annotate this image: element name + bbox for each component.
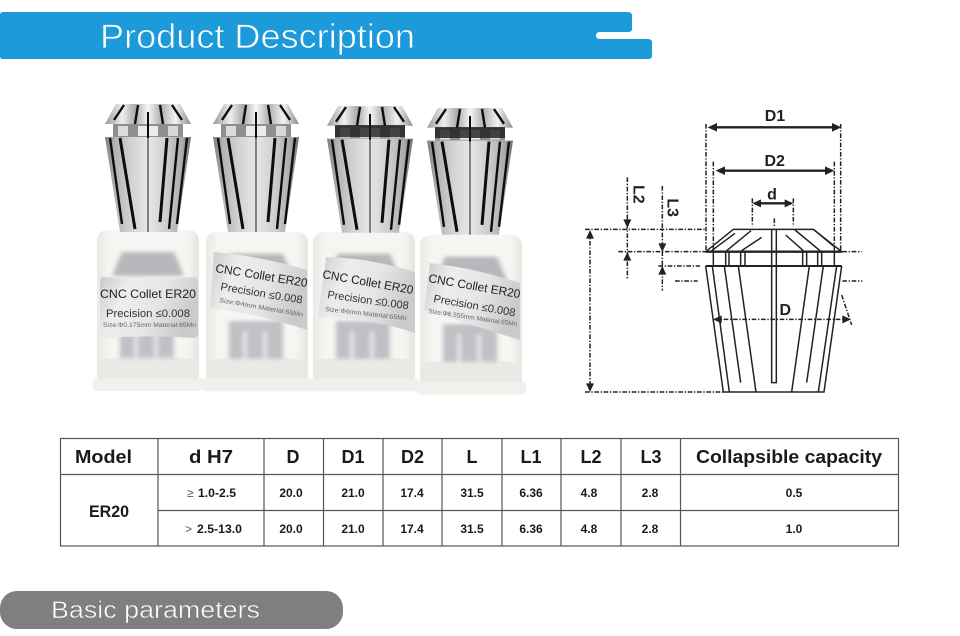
label L2: L2 [629, 185, 646, 204]
data row 1: 2.8 [642, 486, 659, 500]
collet 3 [309, 106, 419, 391]
collet 4 [416, 108, 526, 394]
data row 2: 20.0 [279, 522, 303, 536]
table header row: D [286, 447, 300, 467]
table header row: L2 [580, 447, 602, 467]
data row 2: 21.0 [341, 522, 365, 536]
table header row [75, 447, 882, 467]
label 1: Precision ≤0.008 [106, 308, 190, 320]
footer pill: Basic parameters [0, 591, 343, 629]
label 2: Precision ≤0.008 [220, 281, 303, 307]
data row 1: 31.5 [460, 486, 484, 500]
table header row: D1 [341, 447, 365, 467]
data row 1: 0.5 [786, 486, 803, 500]
label 3: Size:Φ6mm Material:65Mn [325, 306, 407, 322]
data row 2: 31.5 [460, 522, 484, 536]
table header row: d H7 [189, 447, 233, 467]
data row 2: 6.36 [519, 522, 543, 536]
data row 2 [185, 522, 803, 536]
label L3: L3 [664, 198, 681, 217]
extension and center lines [585, 124, 862, 392]
table header row: L [466, 447, 478, 467]
product photo: four ER20 collets in tubes [93, 104, 526, 394]
label D: D [780, 302, 791, 319]
label 4: CNC Collet ER20 [427, 271, 522, 301]
collet 1 [93, 104, 203, 391]
label 3: CNC Collet ER20 [321, 267, 415, 297]
model name: ER20 [89, 502, 129, 521]
data row 1 [187, 486, 803, 500]
data row 2: > [185, 522, 192, 536]
data row 2: 2.5-13.0 [197, 522, 242, 536]
data row 1: ≥ [187, 486, 194, 500]
label 3: Precision ≤0.008 [327, 289, 409, 312]
table header row: Collapsible capacity [696, 447, 882, 467]
collet 2 [202, 104, 312, 391]
data row 2: 1.0 [786, 522, 803, 536]
table header row: L1 [520, 447, 542, 467]
data row 2: 4.8 [581, 522, 598, 536]
table grid [60, 438, 898, 546]
label D1: D1 [765, 108, 785, 125]
data row 1: 21.0 [341, 486, 365, 500]
data row 2: 2.8 [642, 522, 659, 536]
label d: d [767, 186, 777, 203]
label 3 [318, 257, 415, 333]
data row 1: 1.0-2.5 [198, 486, 236, 500]
label 4: Precision ≤0.008 [432, 293, 516, 319]
label D2: D2 [764, 153, 785, 170]
dimension arrows [586, 123, 851, 392]
label 4: Size:Φ6.555mm Material:65Mn [428, 308, 518, 328]
table header row: D2 [401, 447, 424, 467]
specification table [60, 438, 898, 546]
footer text: Basic parameters [51, 597, 260, 624]
data row 1: 17.4 [400, 486, 424, 500]
label 1: CNC Collet ER20 [100, 287, 196, 301]
data row 2: 17.4 [400, 522, 424, 536]
data row 1: 20.0 [279, 486, 303, 500]
collet line drawing [706, 229, 842, 392]
label 2: CNC Collet ER20 [215, 261, 309, 290]
label 1: Size:Φ0.175mm Material:65Mn [103, 322, 196, 329]
data row 1: 4.8 [581, 486, 598, 500]
table header row: Model [75, 447, 132, 467]
title: Product Description [100, 18, 415, 56]
label 1 [100, 277, 198, 338]
label 4 [424, 263, 522, 340]
header banner: Product Description [0, 12, 652, 59]
label 2: Size:Φ4mm Material:65Mn [219, 297, 304, 319]
label 2 [210, 252, 309, 330]
data row 1: 6.36 [519, 486, 543, 500]
table header row: L3 [640, 447, 662, 467]
dimension diagram [585, 108, 862, 392]
